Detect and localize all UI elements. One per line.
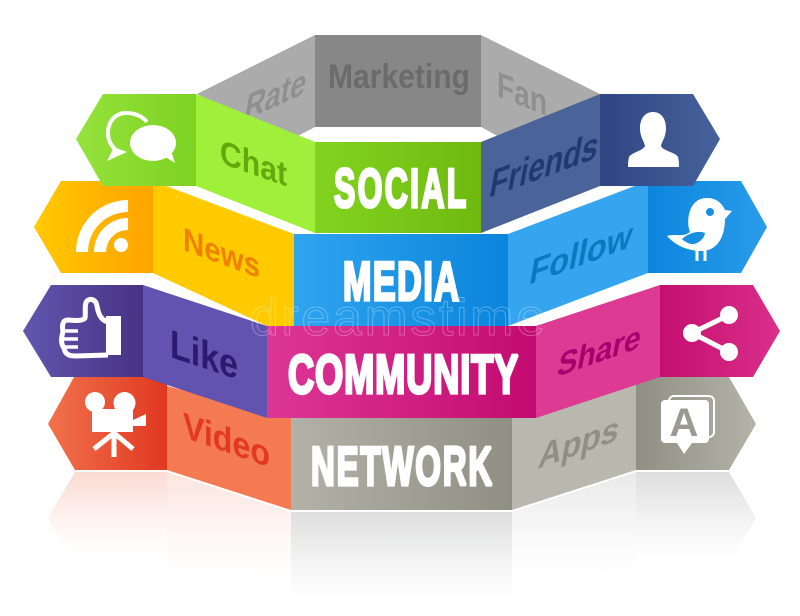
panel: media bbox=[294, 234, 508, 326]
bottom row: video, network, apps bbox=[48, 377, 756, 510]
label: Video: Video bbox=[183, 404, 270, 475]
panel: like arrow bbox=[23, 285, 143, 377]
panel: news side bbox=[153, 181, 294, 326]
label: Apps: Apps bbox=[536, 407, 623, 477]
icon: share nodes bbox=[683, 306, 738, 361]
icon: app badge: A bbox=[670, 401, 698, 445]
label: Friends: Friends bbox=[486, 122, 603, 207]
top row: chat, social, friends bbox=[76, 94, 720, 233]
heading: SOCIAL: SOCIAL bbox=[334, 157, 466, 219]
panel: friends arrow bbox=[600, 94, 720, 186]
icon: person bbox=[628, 112, 679, 167]
heading: NETWORK: NETWORK bbox=[311, 435, 492, 497]
label: Marketing: Marketing bbox=[328, 58, 470, 96]
heading: COMMUNITY: COMMUNITY bbox=[288, 343, 518, 405]
icon: movie camera bbox=[85, 392, 146, 457]
icon: bird bbox=[667, 198, 732, 261]
heading: MEDIA: MEDIA bbox=[343, 251, 459, 312]
panel: apps arrow bbox=[636, 377, 756, 470]
panel: apps side bbox=[512, 377, 636, 510]
panel: video arrow bbox=[48, 377, 167, 470]
panel: follow side bbox=[508, 181, 648, 326]
label: News: News bbox=[183, 221, 260, 286]
panel: share arrow bbox=[660, 285, 780, 377]
panel: social bbox=[315, 142, 481, 233]
panel: network bbox=[291, 418, 512, 510]
panel: share side bbox=[536, 285, 660, 418]
panel: video side bbox=[167, 386, 291, 510]
label: Like: Like bbox=[170, 321, 238, 388]
panel: chat side bbox=[196, 94, 315, 233]
upper row: news, media, follow bbox=[34, 181, 767, 326]
back row: rate, marketing, fan bbox=[197, 35, 600, 140]
icon: thumbs up bbox=[62, 299, 121, 356]
label: Follow: Follow bbox=[526, 214, 637, 294]
label: Fan: Fan bbox=[497, 63, 547, 124]
label: Rate: Rate bbox=[241, 59, 310, 130]
icon: chat bubbles bbox=[107, 113, 176, 163]
panel: friends side bbox=[481, 94, 600, 233]
icon: rss feed bbox=[76, 200, 128, 252]
panel: like side bbox=[143, 285, 267, 418]
icon: app badge bbox=[661, 396, 714, 454]
panel: community bbox=[267, 326, 536, 418]
panel: news arrow bbox=[34, 181, 153, 273]
panel: follow arrow bbox=[648, 181, 767, 273]
label: Share: Share bbox=[555, 318, 644, 385]
reflection under the bottom row bbox=[48, 472, 756, 604]
middle row: like, community, share bbox=[23, 285, 780, 418]
panel: chat arrow bbox=[76, 94, 196, 186]
watermark: dreamstime bbox=[250, 289, 545, 347]
label: Chat: Chat bbox=[220, 133, 287, 194]
